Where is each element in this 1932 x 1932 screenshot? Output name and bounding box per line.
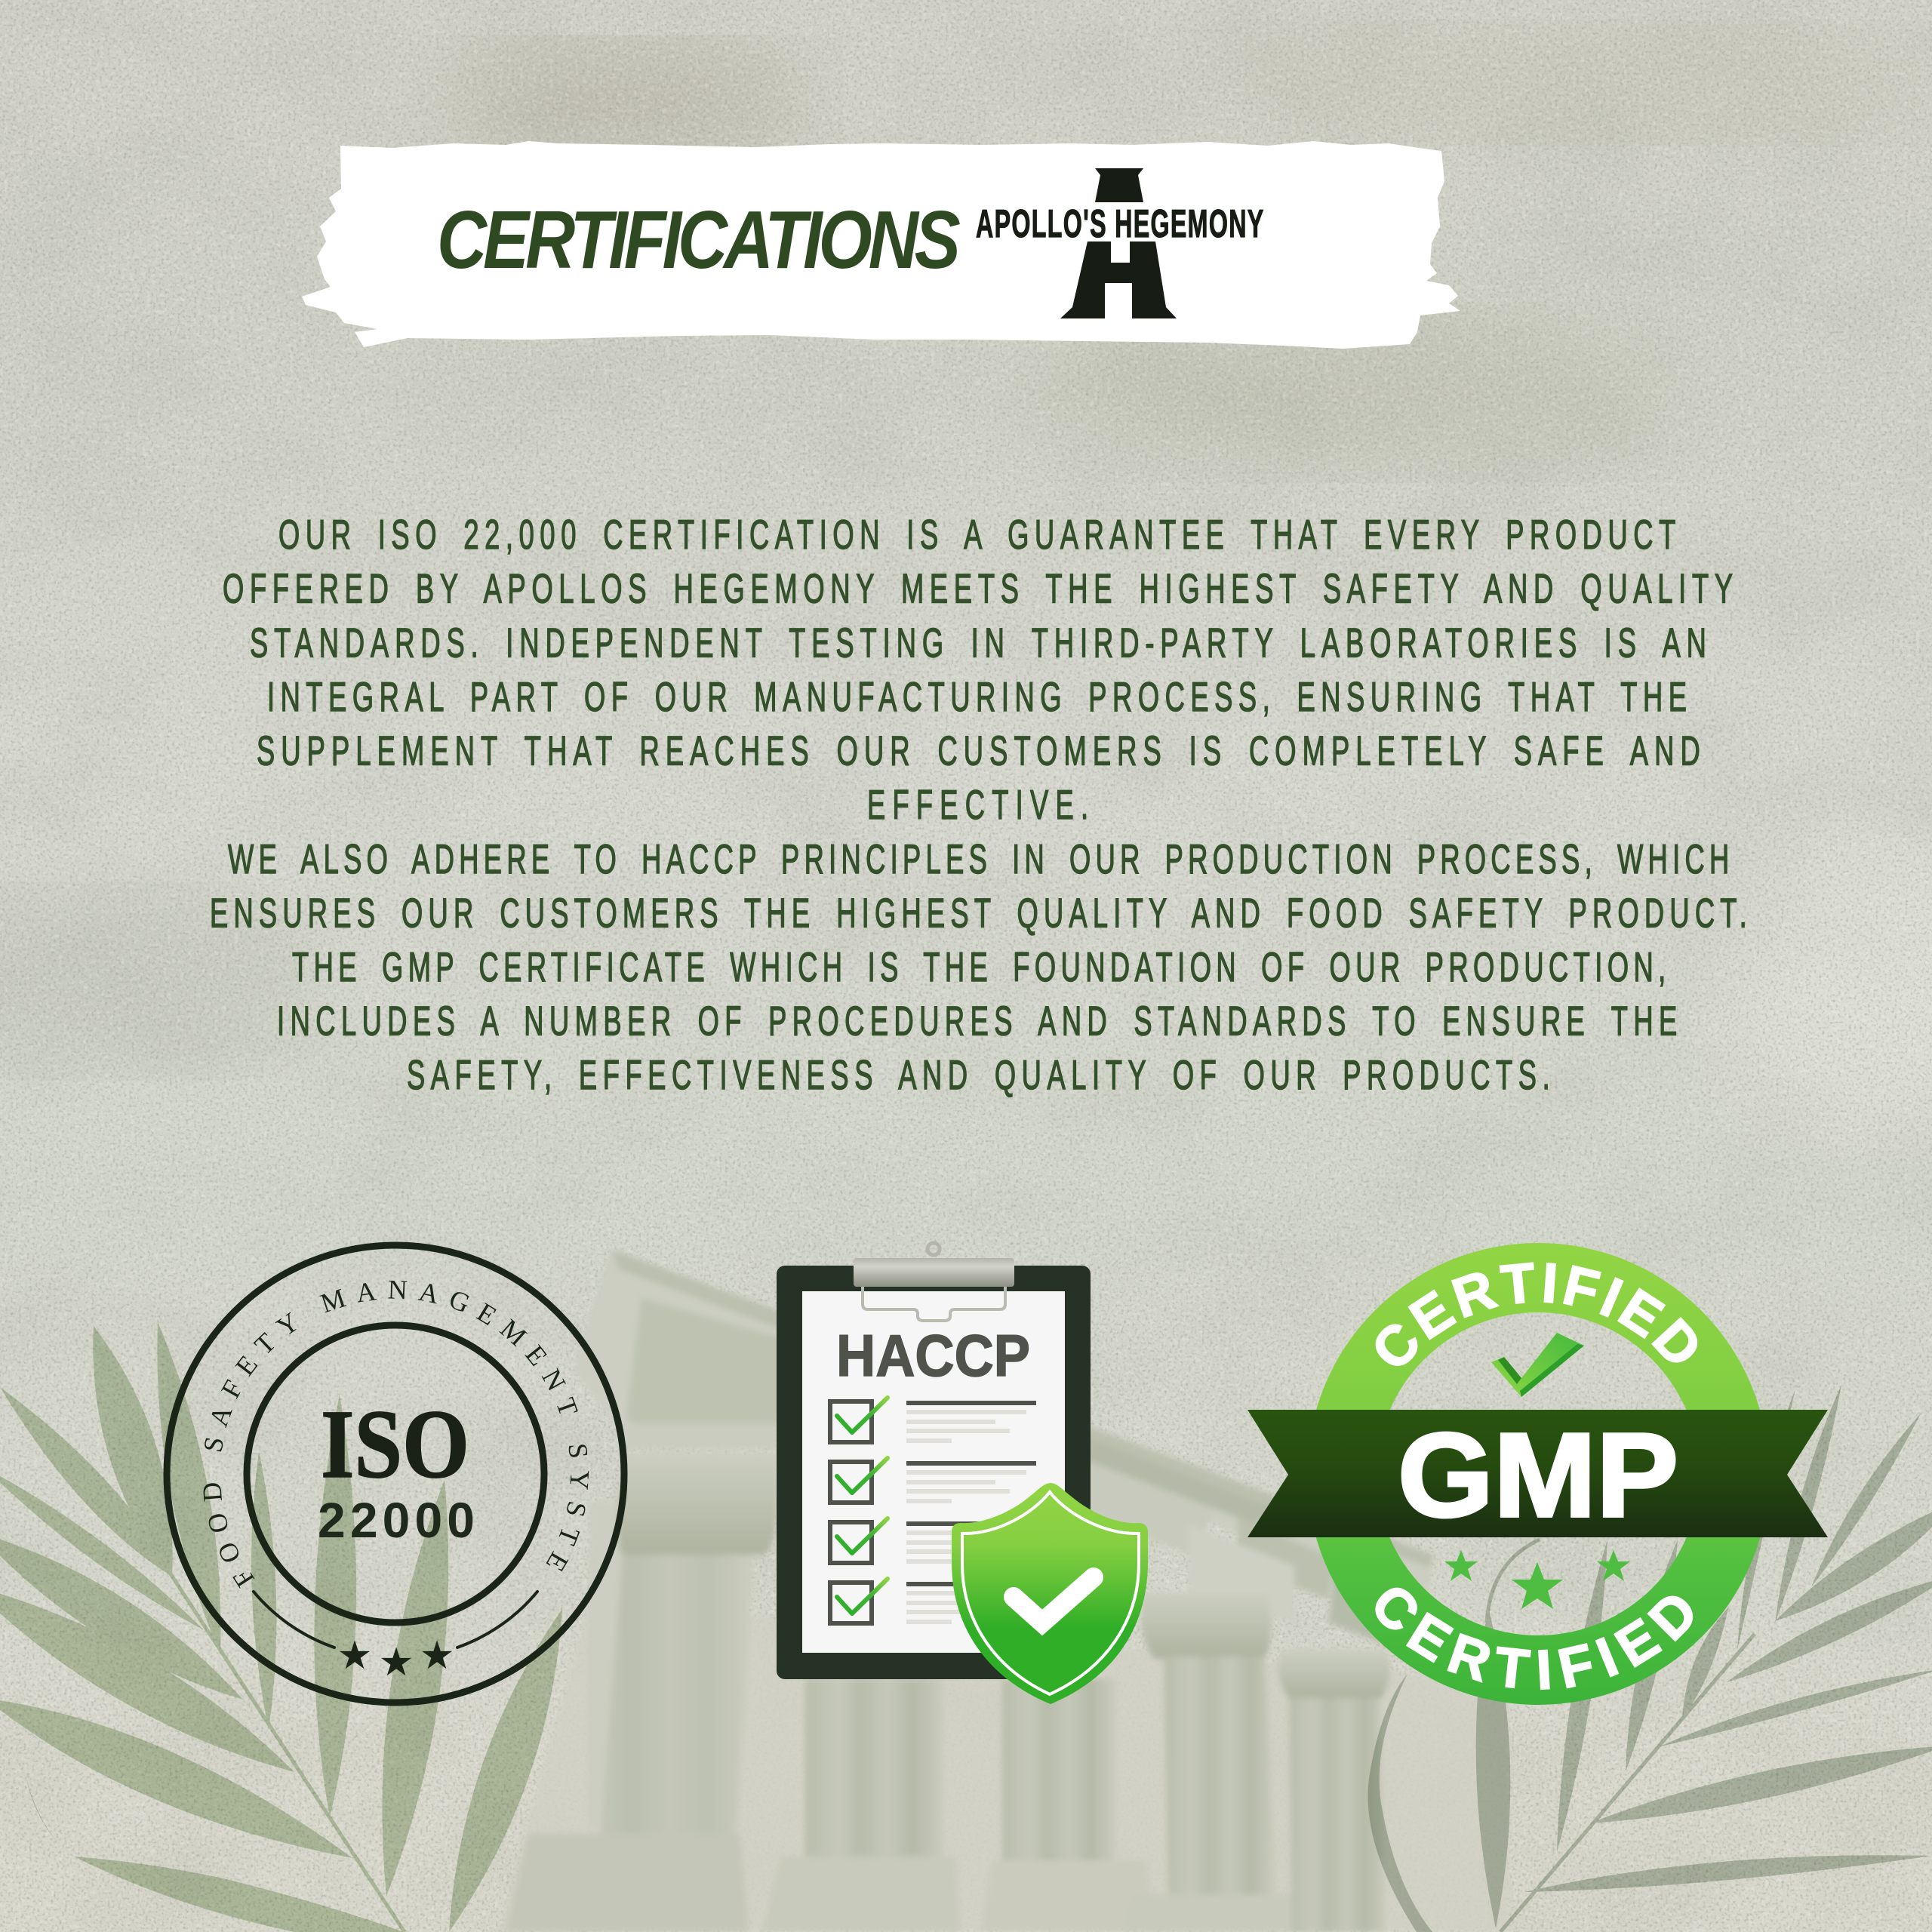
ribbon — [1247, 1410, 1828, 1537]
checklist row two — [830, 1458, 1036, 1503]
temple columns behind the badges — [498, 1249, 1509, 1932]
clipboard clip — [854, 1243, 1014, 1321]
left palm frond — [0, 1322, 562, 1932]
seal stars — [337, 1633, 454, 1685]
column two — [762, 1679, 960, 1932]
column five — [1278, 1650, 1390, 1932]
right palm frond — [1368, 1385, 1932, 1932]
column four — [1122, 1592, 1313, 1932]
badge: ISO 22000 seal — [163, 1242, 628, 1706]
certification description text: INCLUDES A NUMBER OF PROCEDURES AND STANDARDS TO ENSURE THE — [277, 998, 1677, 1044]
seal number: 22000 — [318, 1492, 475, 1548]
seal stars: ★ — [379, 1640, 414, 1685]
checklist row four — [830, 1579, 1036, 1623]
ribbon label: GMP — [1398, 1409, 1678, 1542]
certification description text — [210, 511, 1747, 1098]
certification description text: WE ALSO ADHERE TO HACCP PRINCIPLES IN OUR PRODUCTION PROCESS, WHICH — [228, 835, 1729, 882]
certification description text: STANDARDS. INDEPENDENT TESTING IN THIRD-PARTY LABORATORIES IS AN — [250, 620, 1706, 666]
checklist row one — [830, 1398, 1036, 1442]
icon: green check shield — [952, 1483, 1148, 1704]
brand logo: Apollo's Hegemony A mark: APOLLO'S HEGEMONY — [976, 202, 1263, 246]
certification description text: SAFETY, EFFECTIVENESS AND QUALITY OF OUR PRODUCTS. — [407, 1052, 1550, 1098]
seal stars: ★ — [337, 1633, 372, 1678]
badge: GMP certified — [1247, 1243, 1828, 1705]
badge: HACCP clipboard — [777, 1243, 1148, 1704]
brand logo: Apollo's Hegemony A mark — [976, 168, 1263, 318]
column one — [506, 1423, 777, 1932]
clipboard heading: HACCP — [836, 1322, 1030, 1389]
checklist row three — [830, 1518, 1036, 1563]
certification description text: ENSURES OUR CUSTOMERS THE HIGHEST QUALITY AND FOOD SAFETY PRODUCT. — [210, 890, 1747, 936]
icon: 3d check mark — [1491, 1333, 1584, 1397]
certification description text: EFFECTIVE. — [867, 782, 1088, 828]
badge stars — [1444, 1550, 1630, 1609]
ring text bottom: CERTIFIED — [1375, 1588, 1694, 1690]
certification description text: INTEGRAL PART OF OUR MANUFACTURING PROCESS, ENSURING THAT THE — [267, 673, 1687, 720]
certification description text: SUPPLEMENT THAT REACHES OUR CUSTOMERS IS COMPLETELY SAFE AND — [257, 728, 1700, 774]
column three — [981, 1679, 1155, 1932]
title banner: white brush stroke — [302, 141, 1460, 349]
certification description text: THE GMP CERTIFICATE WHICH IS THE FOUNDATION OF OUR PRODUCTION, — [292, 943, 1666, 990]
banner heading: certifications: CERTIFICATIONS — [437, 195, 961, 286]
seal stars: ★ — [420, 1633, 454, 1678]
seal title: ISO — [321, 1390, 469, 1499]
ring text top: CERTIFIED — [1375, 1262, 1698, 1366]
certification description text: OFFERED BY APOLLOS HEGEMONY MEETS THE HIGHEST SAFETY AND QUALITY — [223, 565, 1733, 611]
certification description text: OUR ISO 22,000 CERTIFICATION IS A GUARANTEE THAT EVERY PRODUCT — [278, 511, 1675, 558]
